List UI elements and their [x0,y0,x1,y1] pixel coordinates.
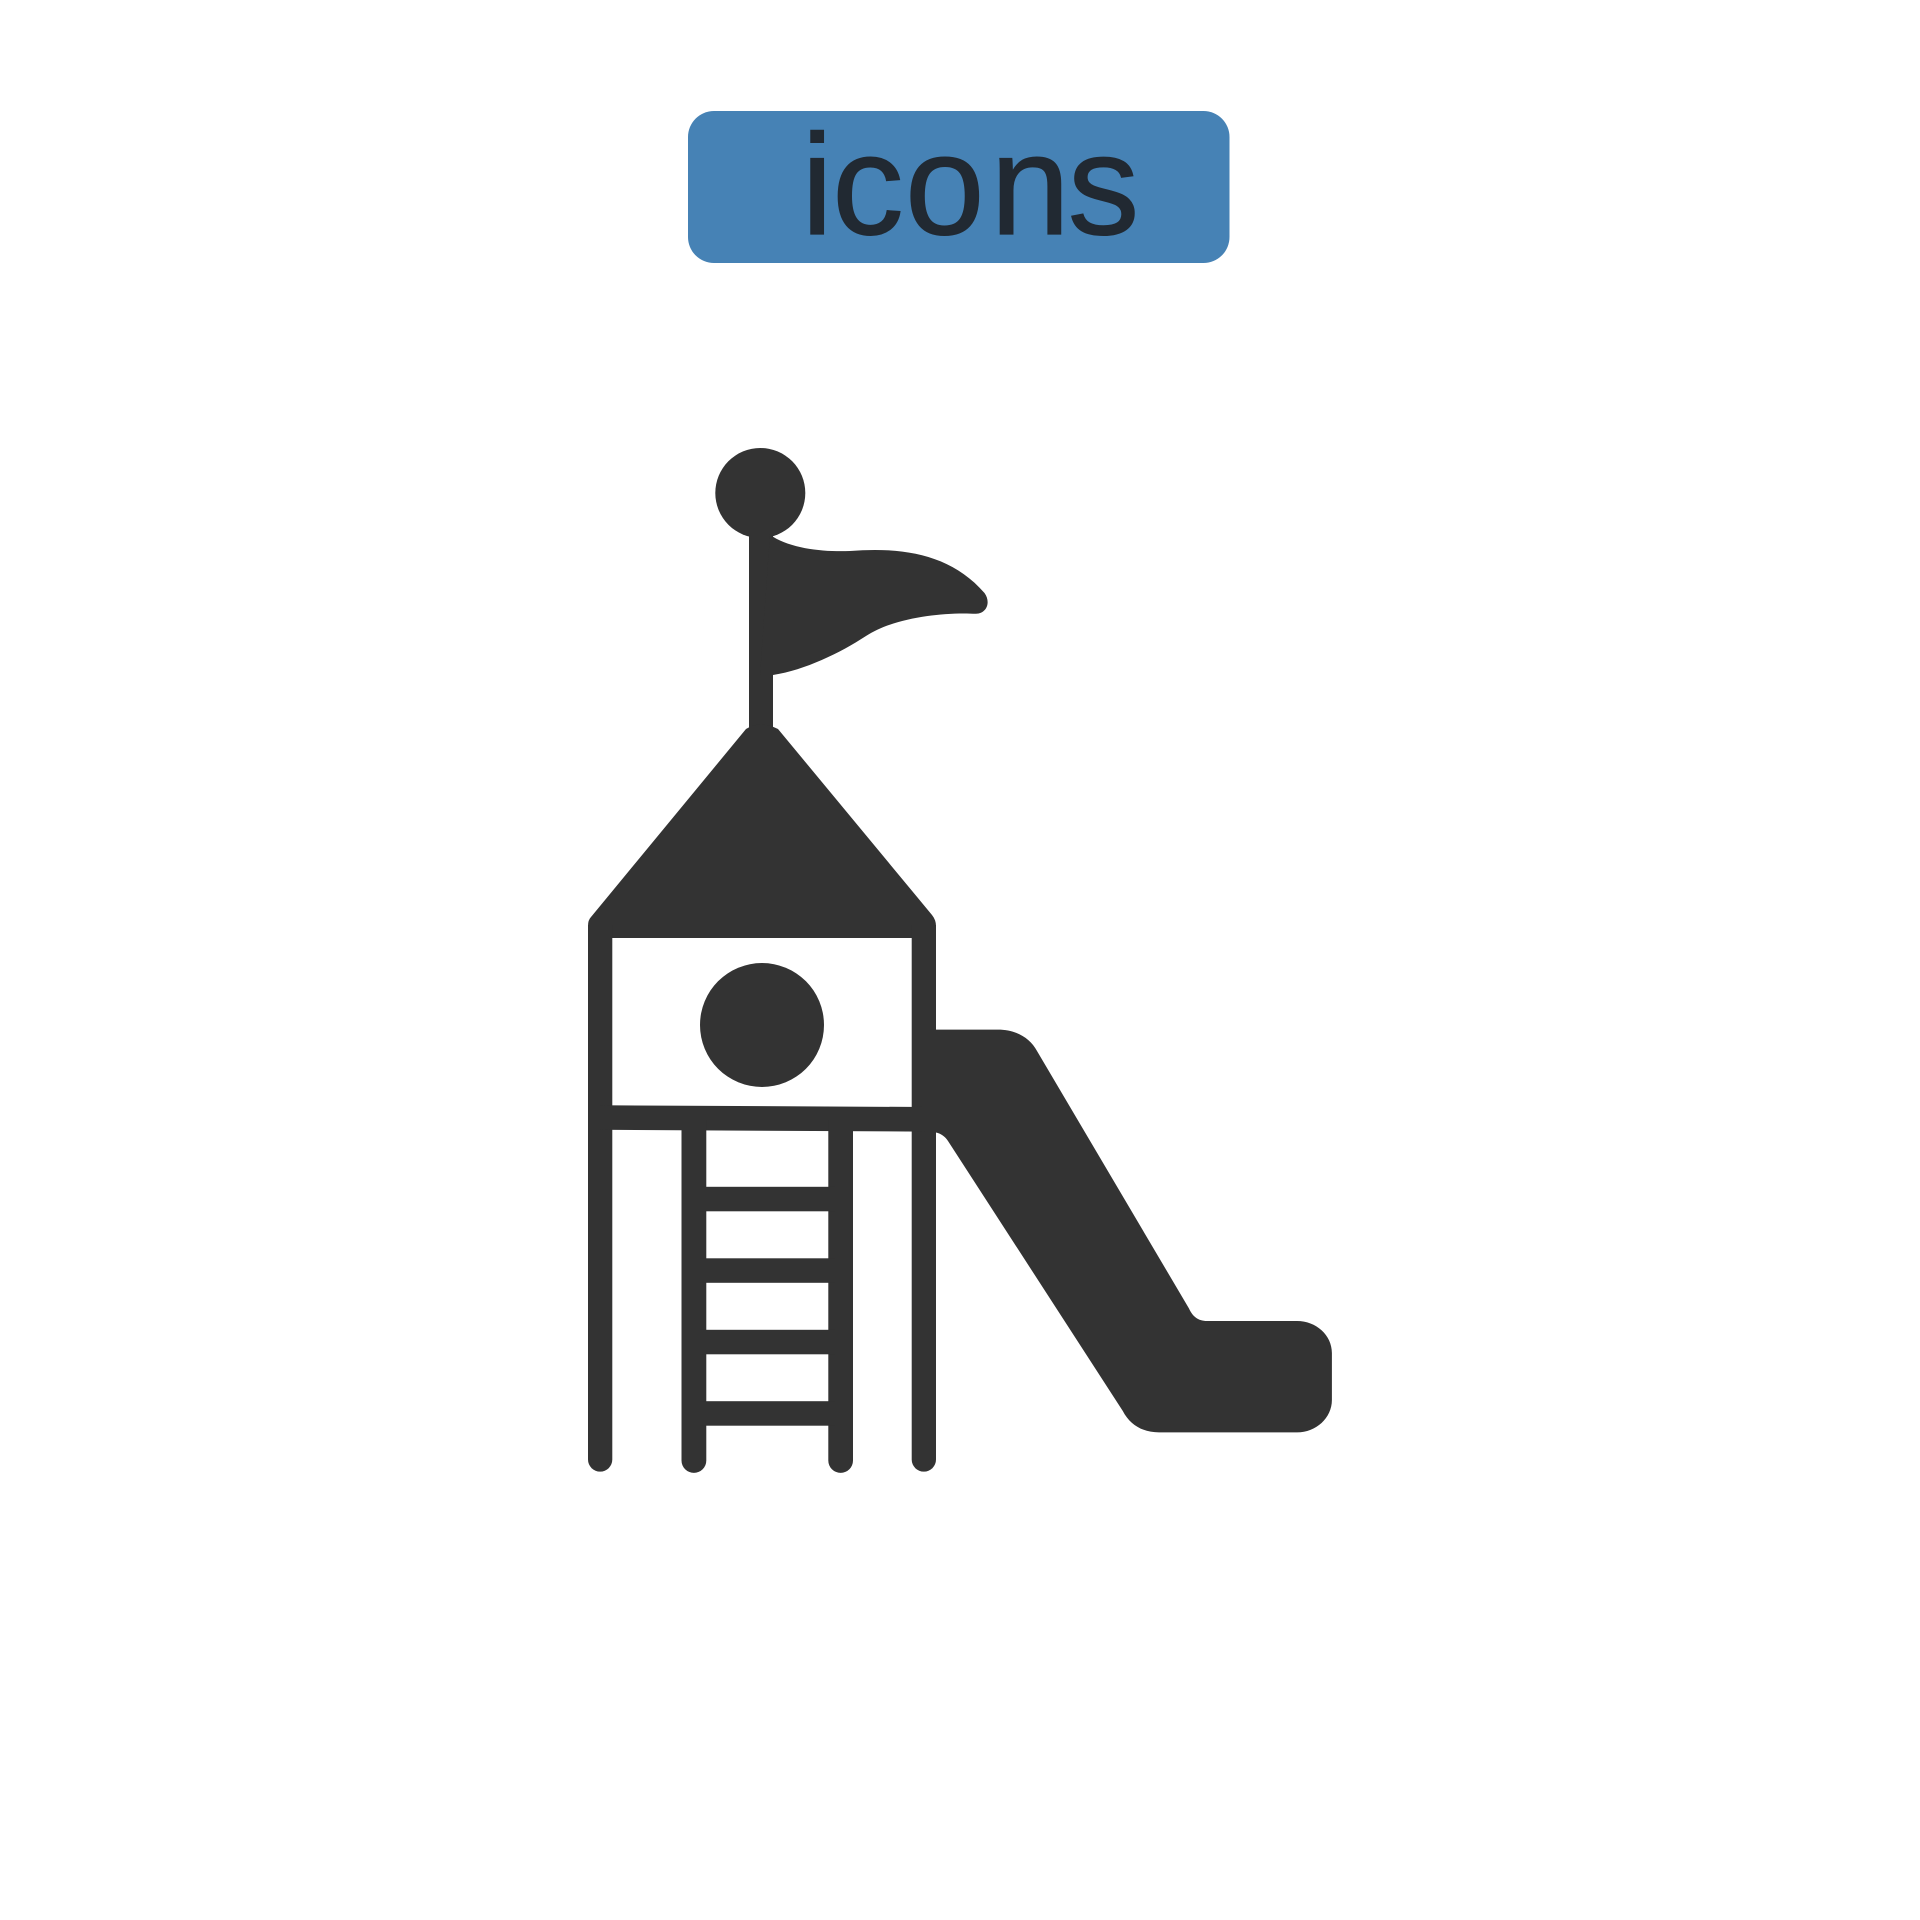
flag pole ball [715,448,805,538]
left tower leg [588,925,612,1472]
icon: playground slide tower [588,448,1332,1473]
roof [588,724,936,938]
ladder rungs [700,1187,835,1426]
badge: icons label [688,106,1230,265]
slide [930,1030,1332,1432]
ladder left rail [682,1120,706,1473]
right tower leg [912,925,936,1472]
badge text: icons [801,106,1139,265]
platform floor [600,1105,925,1132]
flag pole [749,530,773,740]
ladder right rail [828,1120,853,1473]
flag [760,534,988,675]
window [700,963,824,1087]
